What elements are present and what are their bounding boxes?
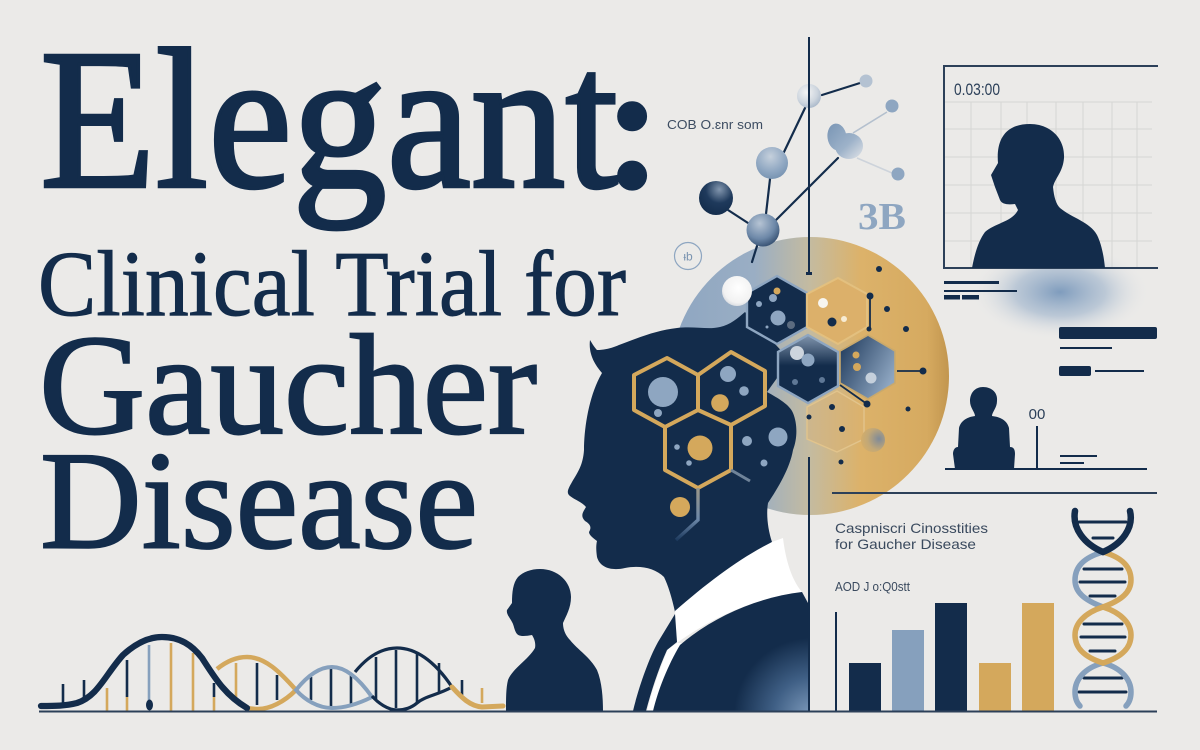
shirt collar: [675, 538, 802, 643]
hexagon: faint: [807, 391, 864, 452]
circuit stem: [676, 488, 698, 540]
stat marker: 00: [1029, 406, 1045, 469]
hexagon: dark upper: [747, 276, 807, 344]
chart caption: [835, 520, 988, 552]
stat marker: 00: 00: [1029, 406, 1045, 423]
small label: COB: COB O.ɛnr som: [667, 118, 763, 132]
baseline: [39, 710, 1157, 712]
title line: Disease: Disease: [40, 424, 478, 578]
vertical axis lower: [808, 457, 810, 711]
icon: heart-shaped node: [826, 122, 863, 159]
icon: circled symbol: ᵻb: [683, 250, 693, 264]
hexagon: dark lower: [778, 335, 838, 403]
ground with notes: [945, 455, 1147, 470]
title colon: :: [602, 24, 664, 229]
vertical DNA helix: [1075, 511, 1131, 706]
stat bars: [1059, 327, 1157, 376]
hexagon: gold: [807, 278, 867, 344]
connector nodes and dots: [806, 266, 926, 464]
title line: Elegant: Elegant: [40, 10, 618, 230]
head silhouette: [568, 312, 796, 612]
timer label: 0.03:00: [954, 80, 1000, 99]
upper right panel: portrait chart: [944, 66, 1158, 340]
lapel white: [647, 643, 686, 711]
chart caption: Caspniscri Cinosstities: [835, 520, 988, 536]
head hexagons: [634, 352, 788, 540]
molecule network: [699, 74, 904, 262]
white sphere: [722, 276, 752, 306]
chart subtitle: AOD J o:Q0stt: [835, 579, 910, 594]
icon: circled symbol: [674, 242, 702, 270]
title line: Gaucher: Gaucher: [39, 306, 537, 464]
short legend bars: [944, 281, 1017, 300]
blue smudge: [970, 244, 1150, 340]
long divider: [832, 492, 1157, 494]
label: 3B: 3B: [858, 196, 906, 238]
bar chart: [835, 603, 1054, 711]
small person silhouette: [506, 569, 603, 711]
large circle: [671, 237, 949, 515]
vertical axis upper: [806, 37, 812, 275]
tie: [633, 614, 677, 711]
horizontal DNA helix: [41, 637, 503, 711]
chart caption: for Gaucher Disease: [835, 536, 976, 552]
hexagon: gradient: [840, 335, 895, 399]
cell hexagons in disc: [747, 276, 895, 452]
frame: [944, 66, 1158, 268]
seated figure: [953, 387, 1015, 469]
silhouette: [972, 124, 1105, 268]
title: [38, 10, 664, 578]
title line: Clinical Trial for: Clinical Trial for: [38, 233, 626, 336]
grid: [945, 102, 1152, 268]
jacket: [653, 592, 809, 711]
